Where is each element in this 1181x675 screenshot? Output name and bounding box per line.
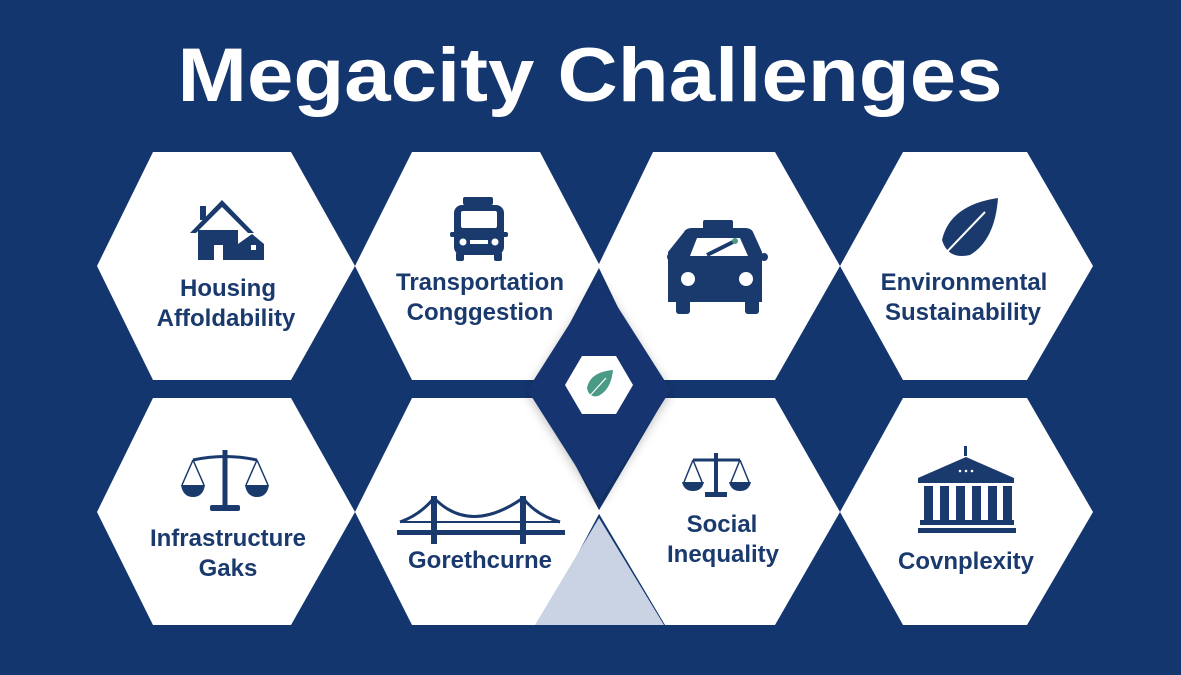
center diamond with leaf hex bbox=[531, 283, 667, 497]
panel: social inequality: Inequality bbox=[667, 541, 780, 568]
panel: environmental sustainability bbox=[840, 152, 1093, 380]
panel: social inequality: Social bbox=[687, 511, 757, 538]
title: Megacity Challenges bbox=[178, 33, 1002, 118]
panel: governance (bridge): Gorethcurne bbox=[408, 547, 552, 574]
icon: scales bbox=[181, 450, 269, 511]
panel: housing affordability bbox=[97, 152, 355, 380]
panel: environmental sustainability: Sustainability bbox=[885, 299, 1042, 326]
icon: taxi car bbox=[667, 220, 768, 314]
panel: complexity: Covnplexity bbox=[898, 548, 1035, 575]
panel: infrastructure gaps: Gaks bbox=[199, 555, 257, 582]
panel: infrastructure gaps bbox=[97, 398, 355, 625]
panel: transportation congestion bbox=[355, 152, 600, 380]
panel: housing affordability: Affoldability bbox=[157, 305, 296, 332]
icon: scales small bbox=[682, 453, 751, 497]
panel: transportation congestion: Conggestion bbox=[407, 299, 553, 326]
icon: van bbox=[450, 197, 508, 261]
panel: housing affordability: Housing bbox=[180, 275, 276, 302]
light triangle bbox=[535, 518, 664, 625]
panel: social inequality bbox=[598, 398, 840, 625]
icon: bridge bbox=[397, 496, 565, 544]
icon: leaf bbox=[942, 198, 998, 256]
panel: infrastructure gaps: Infrastructure bbox=[150, 525, 306, 552]
icon: small leaf hex bbox=[565, 356, 633, 414]
icon: government building bbox=[918, 446, 1016, 533]
panel: car bbox=[598, 152, 840, 380]
icon: house bbox=[190, 200, 264, 260]
panel: governance (bridge) bbox=[355, 398, 600, 625]
panel: transportation congestion: Transportation bbox=[396, 269, 564, 296]
panel: complexity bbox=[840, 398, 1093, 625]
panel: environmental sustainability: Environmental bbox=[881, 269, 1047, 296]
